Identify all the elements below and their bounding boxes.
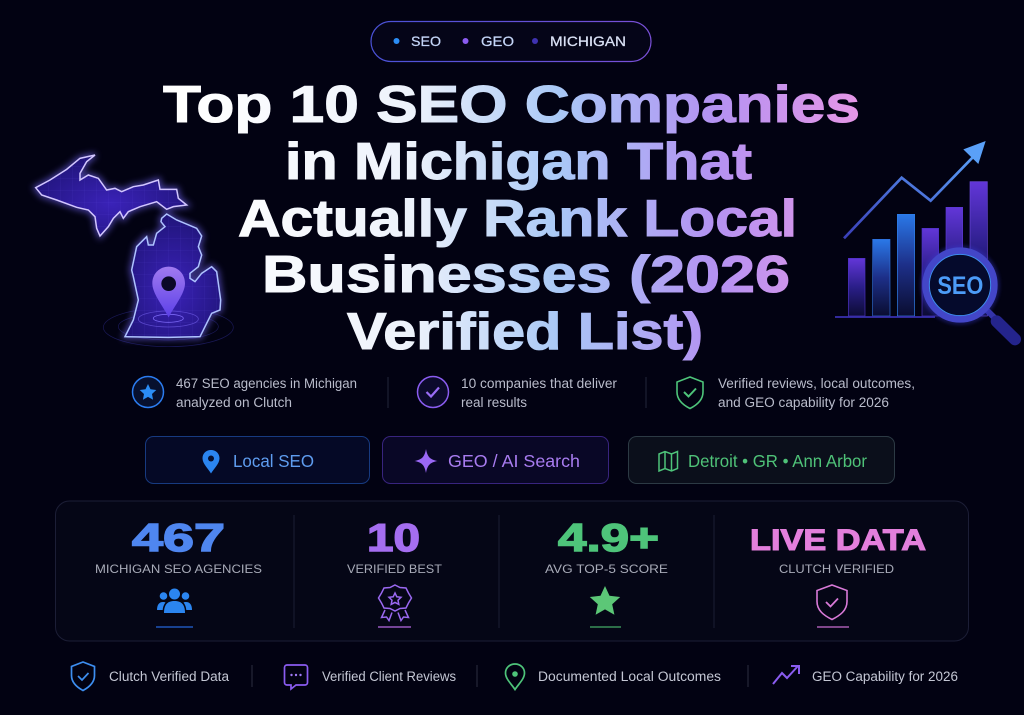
title: Businesses (2026: [262, 246, 790, 304]
button: Local SEO: [146, 436, 370, 484]
stat: 4.9+ score: [545, 517, 668, 627]
footer row: [72, 662, 958, 690]
stat: 4.9+ score: AVG TOP-5 SCORE: [545, 562, 668, 576]
text: companies: real results: [461, 395, 527, 410]
tag pill: [371, 22, 651, 62]
button: Detroit GR Ann Arbor: [628, 436, 894, 484]
icon: location pin: [506, 664, 524, 690]
button: GEO / AI Search: [382, 436, 608, 484]
button: Detroit GR Ann Arbor: Detroit • GR • Ann Arbor: [688, 451, 867, 471]
stats panel: [56, 501, 968, 641]
stat: 10 verified best: [347, 517, 443, 627]
tag pill: SEO: [411, 33, 441, 49]
stat: 10 verified best: 10: [367, 517, 420, 560]
tag pill: MICHIGAN: [550, 33, 626, 49]
stat: live data: LIVE DATA: [750, 524, 926, 557]
title: in Michigan That: [285, 133, 752, 191]
title: Top 10 SEO Companies: [163, 76, 860, 134]
text: Documented Local Outcomes: Documented Local Outcomes: [538, 669, 721, 684]
stat: 4.9+ score: 4.9+: [558, 517, 659, 560]
text: agencies analyzed: 467 SEO agencies in Michigan: [176, 376, 357, 391]
icon: trend arrow: [773, 666, 799, 684]
icon: check in circle: [418, 376, 448, 408]
icon: Michigan map with location pin: [36, 155, 233, 347]
stat: live data: CLUTCH VERIFIED: [779, 562, 894, 576]
icon: chat bubble: [284, 665, 308, 689]
text: Verified Client Reviews: Verified Client Reviews: [322, 669, 456, 684]
info row: [132, 376, 915, 410]
title: Actually Rank Local: [238, 190, 797, 248]
text: verified reviews: Verified reviews, local outcomes,: [718, 376, 915, 391]
button: Local SEO: Local SEO: [233, 451, 314, 471]
stat: 10 verified best: VERIFIED BEST: [347, 562, 443, 576]
text: agencies analyzed: analyzed on Clutch: [176, 395, 292, 410]
text: verified reviews: and GEO capability for 2026: [718, 395, 889, 410]
text: Clutch Verified Data: Clutch Verified Data: [109, 669, 229, 684]
text: agencies analyzed: [176, 376, 357, 410]
stat: live data: [750, 524, 926, 627]
text: GEO Capability for 2026: GEO Capability for 2026: [812, 669, 958, 684]
text: companies: 10 companies that deliver: [461, 376, 618, 391]
stat: 467 agencies: [95, 517, 262, 627]
tag pill: GEO: [481, 33, 514, 49]
icon: SEO growth chart with magnifier: SEO: [937, 272, 983, 300]
title: Verified List): [347, 303, 703, 361]
stat: 467 agencies: MICHIGAN SEO AGENCIES: [95, 562, 262, 576]
icon: green shield: [677, 377, 703, 408]
text: verified reviews: [718, 376, 915, 410]
icon: SEO growth chart with magnifier: [835, 141, 1015, 339]
icon: star in circle: [132, 376, 164, 408]
text: companies: [461, 376, 618, 410]
title: [163, 76, 860, 361]
stat: 467 agencies: 467: [132, 517, 225, 560]
button: GEO / AI Search: GEO / AI Search: [448, 451, 580, 471]
icon: shield: [72, 662, 94, 690]
